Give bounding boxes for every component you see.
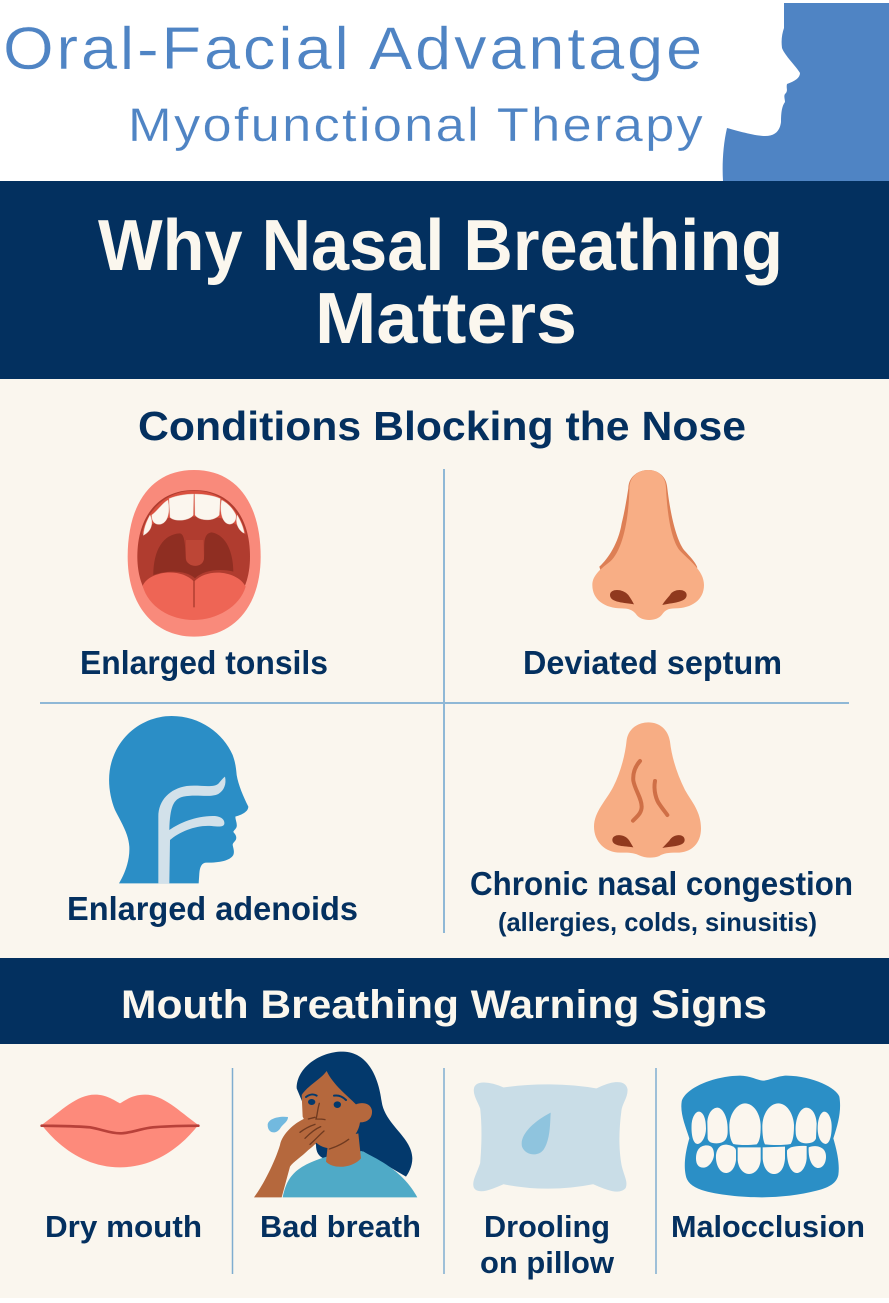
- label: drooling on pillow: on pillow: [480, 1245, 615, 1280]
- header logo: [3, 3, 889, 181]
- icon: face silhouette: [723, 3, 889, 181]
- panel: mouth breathing warning signs: [0, 1044, 889, 1298]
- icon: open mouth: [128, 470, 261, 637]
- panel: conditions blocking the nose: [0, 379, 889, 958]
- title: Why Nasal Breathing: [98, 206, 783, 286]
- section banner: warning signs: [0, 958, 889, 1044]
- label: chronic nasal congestion: (allergies, colds, sinusitis): [498, 907, 817, 937]
- label: chronic nasal congestion: Chronic nasal congestion: [470, 865, 853, 902]
- heading: Conditions Blocking the Nose: [138, 403, 746, 449]
- icon: deviated septum nose: [592, 470, 704, 620]
- label: dry mouth: Dry mouth: [45, 1209, 202, 1244]
- icon: teeth malocclusion: [681, 1076, 840, 1197]
- label: enlarged adenoids: Enlarged adenoids: [67, 890, 358, 927]
- label: enlarged tonsils: Enlarged tonsils: [80, 644, 328, 681]
- title banner: [0, 181, 889, 379]
- icon: person covering mouth: [254, 1052, 417, 1197]
- label: drooling on pillow: Drooling: [484, 1209, 610, 1244]
- logo subtitle: Myofunctional Therapy: [128, 98, 705, 151]
- icon: pillow with drool: [475, 1084, 626, 1190]
- label: chronic nasal congestion: [470, 865, 853, 937]
- title banner: Matters: [315, 279, 577, 359]
- label: drooling on pillow: [480, 1209, 615, 1280]
- label: malocclusion: Malocclusion: [671, 1209, 865, 1244]
- icon: head airway cross-section: [109, 716, 248, 883]
- logo name: Oral-Facial Advantage: [3, 15, 705, 82]
- heading: Mouth Breathing Warning Signs: [121, 983, 767, 1027]
- label: deviated septum: Deviated septum: [523, 644, 782, 681]
- label: bad breath: Bad breath: [260, 1209, 421, 1244]
- icon: congested nose: [594, 722, 701, 858]
- icon: lips: [42, 1095, 198, 1167]
